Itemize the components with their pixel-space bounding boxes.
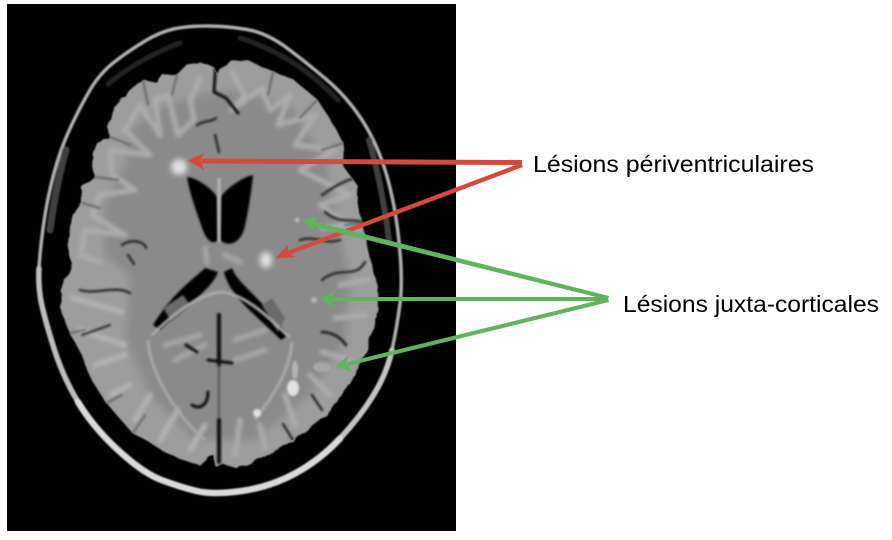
periventricular band (148, 178, 292, 440)
arrow: middle juxtacortical lesion (320, 291, 608, 307)
image background (7, 4, 456, 531)
lesions (171, 159, 331, 417)
white matter (105, 90, 350, 440)
brain tissue (60, 60, 378, 468)
arrow: right periventricular lesion (275, 163, 523, 258)
panel: MRI image (7, 4, 456, 531)
lesion: right periventricular (260, 252, 272, 268)
label: Lésions périventriculaires: Lésions périventriculaires (533, 151, 814, 177)
arrow: frontal lesion (188, 153, 522, 170)
ventricles (153, 175, 287, 340)
lesion: juxtacortical middle (311, 297, 317, 303)
lesion: juxtacortical lower (313, 362, 331, 372)
label: Lésions juxta-corticales: Lésions juxta-corticales (623, 291, 879, 317)
lesion: juxtacortical upper (294, 218, 300, 222)
arrows: périventriculaires (red) (188, 153, 523, 258)
arrow: upper juxtacortical lesion (301, 217, 609, 300)
lesion: frontal periventricular (171, 159, 187, 175)
brain (60, 60, 378, 468)
skull ring (39, 26, 401, 493)
sulci (70, 62, 365, 440)
arrow: lower juxtacortical lesion (335, 298, 609, 371)
bright cortex gyri (72, 72, 368, 455)
lateral ventricle choroid regions (163, 295, 285, 332)
interhemispheric fissure posterior (186, 315, 232, 462)
lesion: parietal (287, 380, 299, 396)
lesion: posterior (253, 409, 261, 417)
arrows: juxta-corticales (green) (301, 217, 609, 371)
